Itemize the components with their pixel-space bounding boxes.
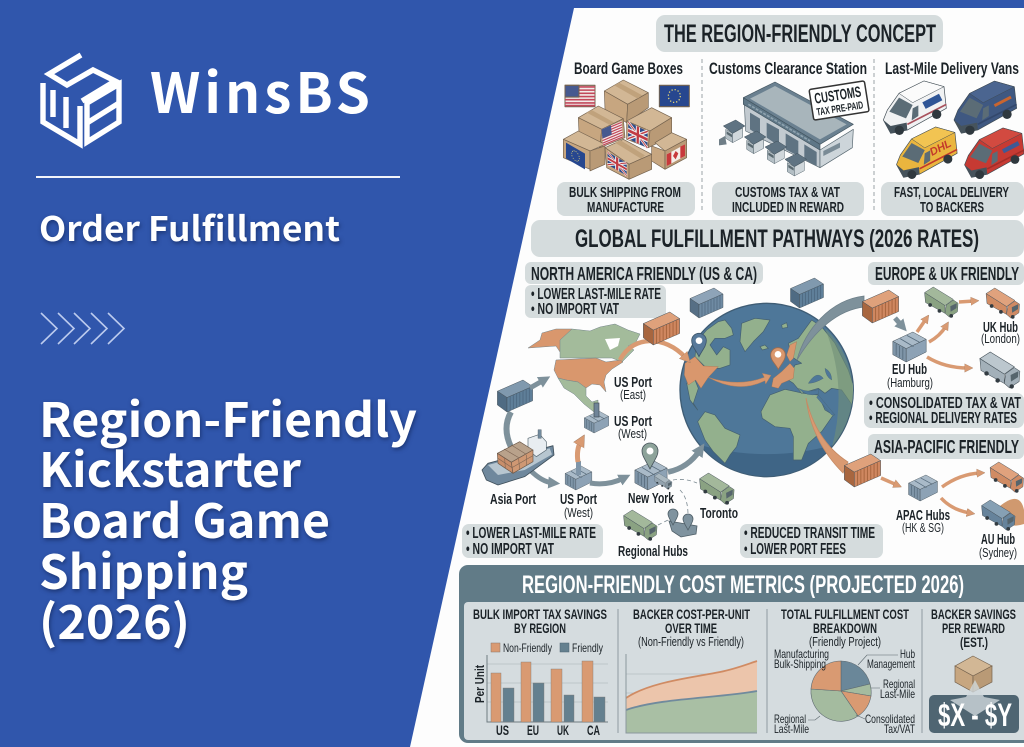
benefits list [525,285,666,318]
area chart: cost per unit [626,606,757,733]
panel: pathways map [462,262,1024,560]
icon: blue container Europe [790,278,824,308]
arrows: EU hub outward [917,301,974,368]
callout: backer savings [929,606,1019,733]
axis title: Per Unit [472,664,487,703]
slice labels: Bulk-Shipping [774,657,826,671]
legend: Friendly [572,641,603,655]
icon: green truck Europe [925,287,958,318]
benefits list lower left [462,524,603,558]
captions: MANUFACTURE [587,199,664,216]
bars [491,661,605,722]
arrow: globe to Asia-Pacific [806,398,848,473]
icon: regional hub pins [668,509,697,537]
icon: orange container Europe [862,290,899,323]
slice labels: Hub [900,647,915,661]
slice labels: Last-Mile [774,722,809,736]
label: US Port West upper: US Port [614,413,652,430]
icon: gray truck [980,352,1020,389]
benefits list: • LOWER LAST-MILE RATE [531,286,661,303]
icon: cargo ship [482,430,554,485]
column headings [574,59,1019,78]
panel: region-friendly concept [557,15,1024,216]
icon: orange truck UK [986,288,1020,319]
legend [491,641,603,655]
label: US Port West upper [614,413,652,441]
bar chart: tax savings: BY REGION [514,620,566,636]
captions: BULK SHIPPING FROM [569,184,681,201]
captions: CUSTOMS TAX & VAT [735,184,840,201]
divider line [36,176,400,178]
arrow: map to globe [620,341,686,360]
icon: blue truck Sydney [982,500,1015,531]
legend: Non-Friendly [503,641,552,655]
icon: factory port [584,403,609,433]
label: EU Hub: EU Hub [892,361,927,378]
label: US Port East: (East) [620,387,646,402]
area chart: cost per unit: OVER TIME [665,620,717,636]
main title: Shipping [39,534,248,603]
icon: Australia shape [1000,499,1024,526]
icon: cube logo [43,55,119,144]
benefits list: • NO IMPORT VAT [531,301,619,318]
area chart: cost per unit: BACKER COST-PER-UNIT [633,606,750,622]
benefits list Asia-Pacific: • REDUCED TRANSIT TIME [744,525,875,542]
labels: Asia Port, US Port, New York, Toronto: (West) [564,505,593,520]
icon: parcel [955,656,992,692]
label: AU Hub [979,531,1017,560]
main title: Region-Friendly [39,382,417,451]
icon: blue container left [497,380,533,412]
arrow: New York to globe [668,450,700,472]
captions: INCLUDED IN REWARD [732,199,844,216]
arrow: ship to container [506,412,511,447]
benefits list Asia-Pacific [740,524,883,558]
category labels: UK [557,723,569,738]
slice labels: Tax/VAT [884,722,915,736]
label: APAC Hubs: (HK & SG) [902,520,944,535]
area chart: cost per unit: (Non-Friendly vs Friendly) [638,635,744,649]
sign: customs tax pre-paid: CUSTOMS [813,84,862,108]
label: EU Hub: (Hamburg) [887,375,933,390]
labels: Asia Port, US Port, New York, Toronto: Asia Port [490,491,536,508]
arrow across the Atlantic [708,373,771,387]
label: US Port East: US Port [614,374,652,391]
heading: North America [525,262,763,284]
bar chart: tax savings: BULK IMPORT TAX SAVINGS [473,606,607,622]
arrow: port to New York [590,478,624,484]
column headings: Customs Clearance Station [709,59,867,78]
bar chart: tax savings [472,606,608,738]
slice labels: Manufacturing [774,647,829,661]
icon: APAC hub [909,475,937,501]
arrow: globe to Europe [797,296,864,360]
benefits list lower left: • LOWER LAST-MILE RATE [466,525,596,542]
sign: customs tax pre-paid: TAX PRE-PAID [816,99,864,119]
arrow: container to EU hub [895,318,902,326]
column headings: Board Game Boxes [574,59,683,78]
label: APAC Hubs: APAC Hubs [896,507,950,524]
icon: blue container [690,288,723,318]
region: Europe and UK [790,262,1024,428]
icon: pile of board game boxes [563,80,689,179]
label: APAC Hubs [896,507,950,535]
slice labels [774,647,915,736]
white infographic sheet [410,8,1024,747]
slice labels: Last-Mile [880,687,915,701]
heading: North America: NORTH AMERICA FRIENDLY (US & CA) [531,264,757,284]
pie chart: cost breakdown: (Friendly Project) [809,635,881,649]
benefits list Europe [864,393,1024,428]
main title: Kickstarter [39,432,302,501]
subtitle: Order Fulfillment [39,202,340,251]
DHL mark: DHL [928,138,954,159]
region: North America [462,262,763,560]
category labels [496,723,600,738]
label: US Port East [614,374,652,402]
US flag [565,85,595,107]
main title [39,382,417,653]
icon: pin North America [692,333,706,357]
pie slices [811,661,871,721]
labels: Asia Port, US Port, New York, Toronto [490,490,738,522]
labels: Asia Port, US Port, New York, Toronto: New York [628,490,674,507]
captions [557,182,1024,216]
icon: orange container Asia-Pacific [844,454,881,487]
slice labels: Regional [883,677,915,691]
slice labels: Management [867,657,915,671]
label: US Port West upper: (West) [618,426,647,441]
icon: orange container [643,312,680,345]
arrow: container to map [530,380,544,388]
wordmark: WinsBS [150,49,370,129]
main title: (2026) [39,584,190,653]
pie chart: cost breakdown: BREAKDOWN [813,620,877,636]
main title: Board Game [39,483,330,552]
arrow: port upward [577,441,581,462]
icon: orange truck Asia-Pacific [990,462,1024,493]
region: Asia-Pacific [740,398,1024,560]
icon: chevrons [41,313,124,344]
icon: green truck Toronto [700,473,734,505]
label: EU Hub [887,361,933,390]
slice labels: Consolidated [865,712,915,726]
icon: North America map [528,324,640,412]
icon: New York hub [635,443,672,490]
captions: TO BACKERS [920,199,984,216]
icon: US port west [565,461,592,490]
callout: backer savings: (EST.) [960,634,988,650]
pie chart: cost breakdown: TOTAL FULFILLMENT COST [781,606,909,622]
benefits list lower left: • NO IMPORT VAT [466,541,554,558]
icon: EU hub [893,332,926,362]
arrow: ship to port [530,470,553,483]
panel: cost metrics [459,565,1024,743]
icon: green truck regional [624,510,657,541]
slice labels: Regional [774,712,806,726]
pie chart: cost breakdown [774,606,915,736]
labels: Asia Port, US Port, New York, Toronto: US Port [560,491,597,508]
category labels: US [496,723,509,738]
sign: customs tax pre-paid [809,81,869,120]
brand logo [43,49,370,144]
icon: delivery vans [883,81,1024,179]
arrows: Asia-Pacific routes [881,473,980,513]
icon: pin Europe [771,348,785,369]
benefits list Asia-Pacific: • LOWER PORT FEES [744,541,846,558]
category labels: EU [527,723,539,738]
icon: globe [680,303,855,477]
label: UK Hub [981,319,1020,346]
EU flag [659,85,689,107]
labels: Asia Port, US Port, New York, Toronto: Toronto [700,505,738,522]
heading: global fulfillment pathways [531,220,1024,257]
category labels: CA [587,723,600,738]
icon: customs clearance station [719,82,853,176]
Canadian flag sticker [667,144,685,166]
heading: concept [656,15,943,52]
label: Regional Hubs: Regional Hubs [618,543,688,560]
